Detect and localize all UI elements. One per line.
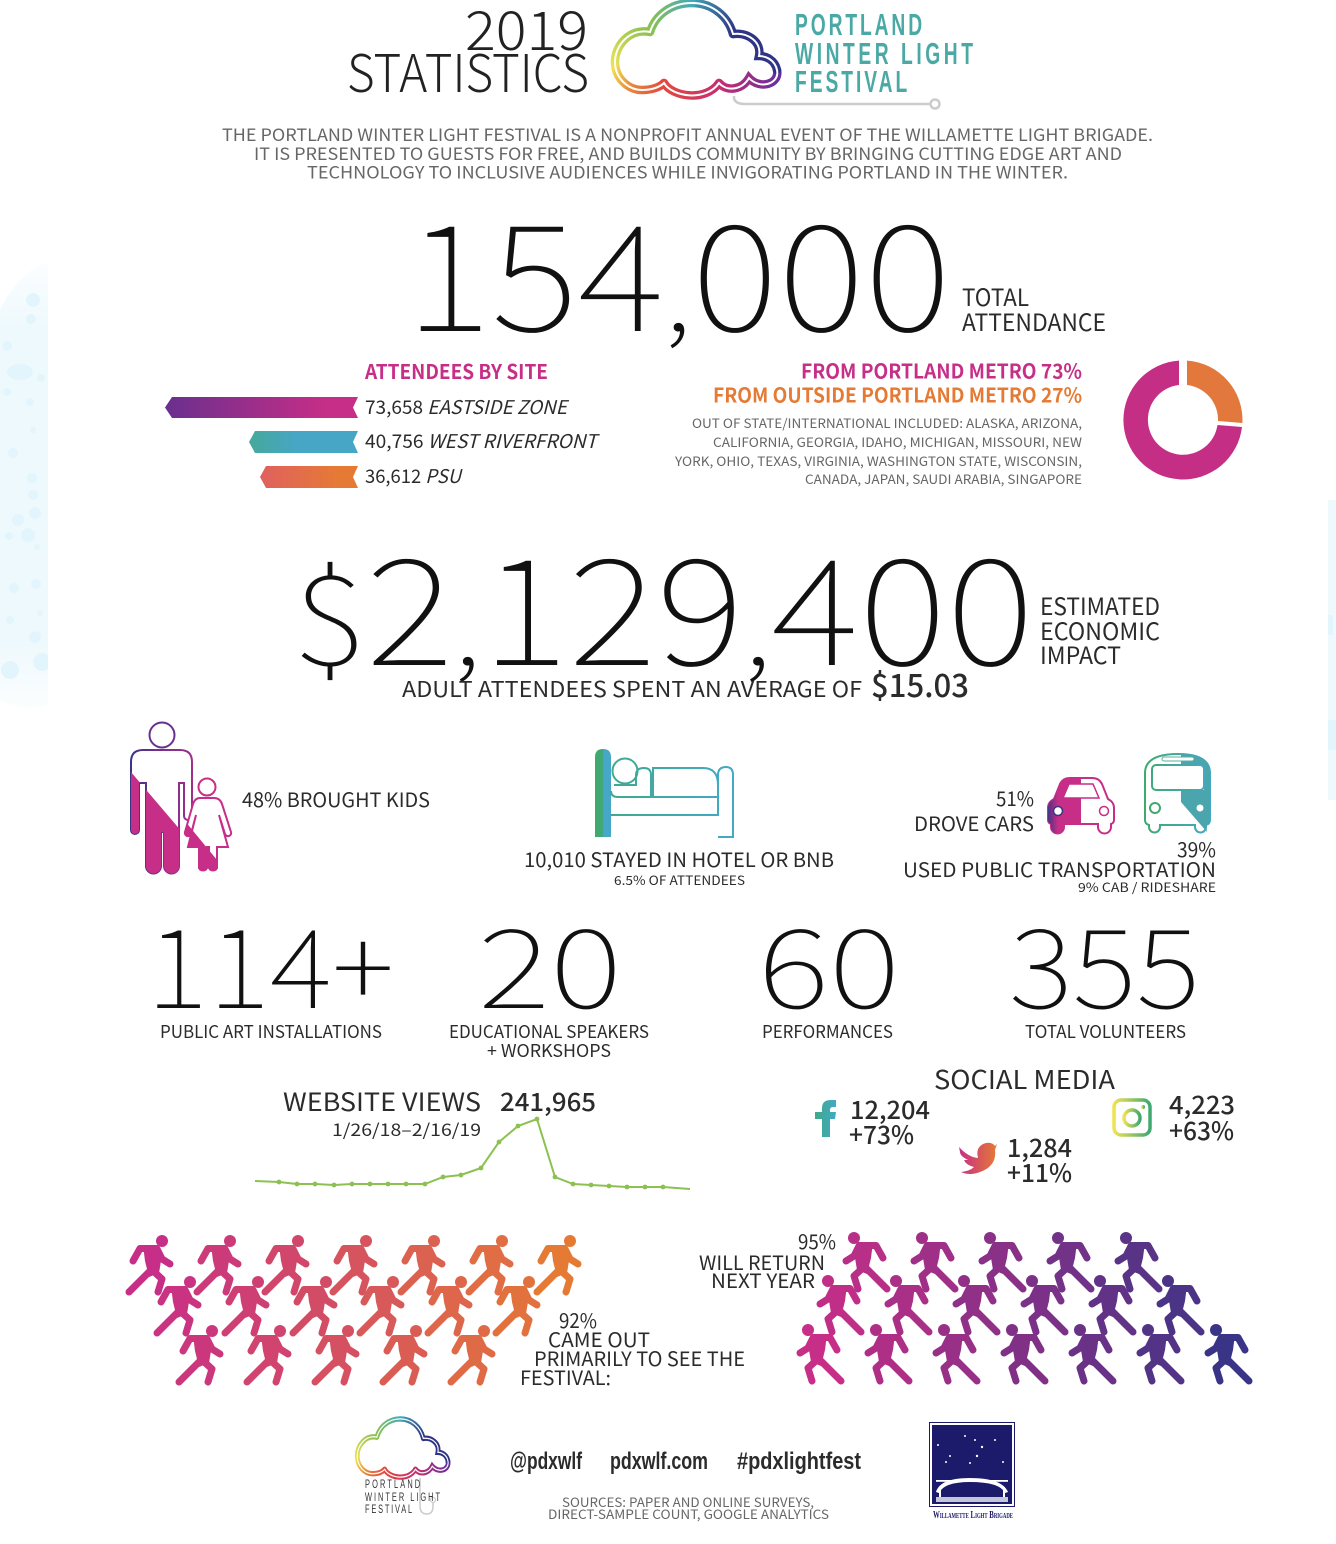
economic impact figure: $2,129 ,400 <box>292 493 1034 708</box>
social handles: pdxwlf.com <box>610 1448 708 1475</box>
stat: 92 percent: CAME OUT <box>548 1324 650 1353</box>
intro paragraph: THE PORTLAND WINTER LIGHT FESTIVAL IS A NONPROFIT ANNUAL EVENT OF THE WILLAMETTE LIGHT BRIGADE. <box>222 121 1153 146</box>
stat: instagram <box>1169 1086 1235 1148</box>
economic impact label: IMPACT <box>1040 636 1121 671</box>
stat: stayed in hotel: 10,010 STAYED IN HOTEL OR BNB <box>524 844 834 873</box>
donut chart: metro share <box>1123 361 1242 479</box>
stat: performances: 60 <box>758 880 900 1040</box>
stat: educational speakers and workshops: + WORKSHOPS <box>487 1038 611 1063</box>
bar chart: attendees by site: 40,756 WEST RIVERFRONT <box>365 427 601 454</box>
stat: 92 percent: 92% <box>559 1305 597 1334</box>
economic impact label: ESTIMATED <box>1040 587 1160 622</box>
bar chart: attendees by site <box>165 393 601 489</box>
icon: bed <box>595 749 733 837</box>
heading: website views: 241,965 <box>500 1083 596 1119</box>
out of state list: YORK, OHIO, TEXAS, VIRGINIA, WASHINGTON STATE, WISCONSIN, <box>674 451 1082 470</box>
stat: drove cars: DROVE CARS <box>914 808 1034 837</box>
total attendance figure: 154 ,000 <box>405 159 951 374</box>
stat: 92 percent: PRIMARILY TO SEE THE <box>534 1343 745 1372</box>
stat: stayed in hotel: 6.5% OF ATTENDEES <box>614 870 745 889</box>
average spend: ADULT ATTENDEES SPENT AN AVERAGE OF <box>402 672 862 704</box>
pictogram: 92 percent came for the festival <box>129 1235 578 1382</box>
intro paragraph <box>222 121 1153 184</box>
heading: website views: WEBSITE VIEWS <box>283 1083 481 1119</box>
stat: instagram: 4,223 <box>1169 1086 1235 1122</box>
stat: twitter <box>1007 1129 1072 1190</box>
festival name: WINTER LIGHT <box>795 38 973 71</box>
stat: drove cars <box>914 783 1034 837</box>
title: 2019 statistics <box>347 0 589 107</box>
stat: educational speakers and workshops: EDUCATIONAL SPEAKERS <box>449 1019 649 1044</box>
stat: public transportation: 9% CAB / RIDESHARE <box>1078 877 1216 896</box>
icon: instagram <box>1114 1100 1150 1135</box>
stat: public transportation <box>903 834 1216 896</box>
stat: brought kids: 48% BROUGHT KIDS <box>242 784 430 813</box>
line chart: website views <box>255 1117 690 1189</box>
total attendance label: ATTENDANCE <box>962 303 1106 338</box>
bar chart: attendees by site: 73,658 EASTSIDE ZONE <box>365 393 570 420</box>
stat: 95 percent: 95% <box>798 1226 836 1255</box>
total attendance label: TOTAL <box>962 278 1029 313</box>
average spend: $15.03 <box>871 661 969 707</box>
stat: facebook: 12,204 <box>850 1091 930 1127</box>
stat: public art installations: PUBLIC ART INSTALLATIONS <box>160 1019 382 1044</box>
festival name: FESTIVAL <box>795 66 907 99</box>
metro share headings: FROM OUTSIDE PORTLAND METRO 27% <box>713 380 1082 408</box>
icon: facebook <box>815 1100 836 1137</box>
stat: total volunteers: TOTAL VOLUNTEERS <box>1025 1019 1186 1044</box>
stat: facebook: +73% <box>849 1116 914 1152</box>
stat: 95 percent: NEXT YEAR <box>711 1265 815 1294</box>
heading: attendees by site: ATTENDEES BY SITE <box>364 356 548 385</box>
logo: Willamette Light Brigade: Willamette Light Brigade <box>933 1510 1013 1521</box>
icon: bus <box>1145 754 1210 833</box>
out of state list: CALIFORNIA, GEORGIA, IDAHO, MICHIGAN, MISSOURI, NEW <box>713 432 1083 451</box>
stat: educational speakers and workshops <box>449 880 649 1063</box>
stat: instagram: +63% <box>1169 1112 1234 1148</box>
sources: DIRECT-SAMPLE COUNT, GOOGLE ANALYTICS <box>548 1504 829 1523</box>
stat: public art installations: 114+ <box>146 880 394 1040</box>
heading: website views: 1/26/18–2/16/19 <box>332 1116 481 1141</box>
social handles: #pdxlightfest <box>737 1448 861 1475</box>
intro paragraph: IT IS PRESENTED TO GUESTS FOR FREE, AND BUILDS COMMUNITY BY BRINGING CUTTING EDGE ART AND <box>254 140 1122 165</box>
out of state list <box>674 413 1083 488</box>
logo: Willamette Light Brigade <box>930 1422 1014 1521</box>
social handles: @pdxwlf <box>510 1448 583 1475</box>
stat: educational speakers and workshops: 20 <box>478 880 622 1040</box>
total attendance label <box>962 278 1106 338</box>
out of state list: CANADA, JAPAN, SAUDI ARABIA, SINGAPORE <box>805 469 1082 488</box>
sources: SOURCES: PAPER AND ONLINE SURVEYS, <box>562 1492 814 1511</box>
footer logo: cloud and festival name: FESTIVAL <box>365 1503 412 1517</box>
stat: public transportation: 39% <box>1177 834 1216 863</box>
out of state list: OUT OF STATE/INTERNATIONAL INCLUDED: ALASKA, ARIZONA, <box>692 413 1082 432</box>
economic impact label <box>1040 587 1160 671</box>
average spend <box>402 661 969 707</box>
intro paragraph: TECHNOLOGY TO INCLUSIVE AUDIENCES WHILE INVIGORATING PORTLAND IN THE WINTER. <box>307 158 1068 184</box>
bar chart: attendees by site: 36,612 PSU <box>365 462 463 489</box>
icon: twitter <box>959 1143 997 1174</box>
stat: total volunteers: 355 <box>1009 880 1200 1040</box>
stat: 95 percent: WILL RETURN <box>699 1247 825 1276</box>
festival name: PORTLAND <box>795 9 922 42</box>
social handles <box>510 1448 861 1475</box>
stat: facebook <box>849 1091 930 1152</box>
festival name <box>795 9 973 99</box>
metro share headings <box>713 356 1082 408</box>
heading: social media: SOCIAL MEDIA <box>934 1060 1115 1097</box>
stat: 92 percent: FESTIVAL: <box>520 1362 611 1391</box>
stat: twitter: 1,284 <box>1007 1129 1072 1165</box>
stat: 92 percent <box>520 1305 745 1391</box>
stat: public transportation: USED PUBLIC TRANSPORTATION <box>903 854 1216 883</box>
heading: website views <box>283 1083 596 1141</box>
stat: 95 percent <box>699 1226 836 1294</box>
stat: twitter: +11% <box>1007 1154 1072 1190</box>
stat: drove cars: 51% <box>996 783 1034 812</box>
title: 2019 statistics: STATISTICS <box>347 32 589 107</box>
footer logo: cloud and festival name <box>357 1419 448 1517</box>
sources <box>548 1492 829 1523</box>
footer logo: cloud and festival name: PORTLAND <box>365 1478 420 1492</box>
economic impact label: ECONOMIC <box>1040 612 1160 647</box>
metro share headings: FROM PORTLAND METRO 73% <box>801 356 1082 384</box>
pictogram: 95 percent will return <box>800 1232 1249 1381</box>
footer logo: cloud and festival name: WINTER LIGHT <box>365 1491 440 1505</box>
icon: car <box>1048 778 1114 834</box>
stat: performances: PERFORMANCES <box>762 1019 893 1044</box>
logo: rainbow cloud with cord <box>615 3 940 108</box>
icon: adult and child <box>131 722 231 874</box>
stat: stayed in hotel <box>524 844 834 889</box>
